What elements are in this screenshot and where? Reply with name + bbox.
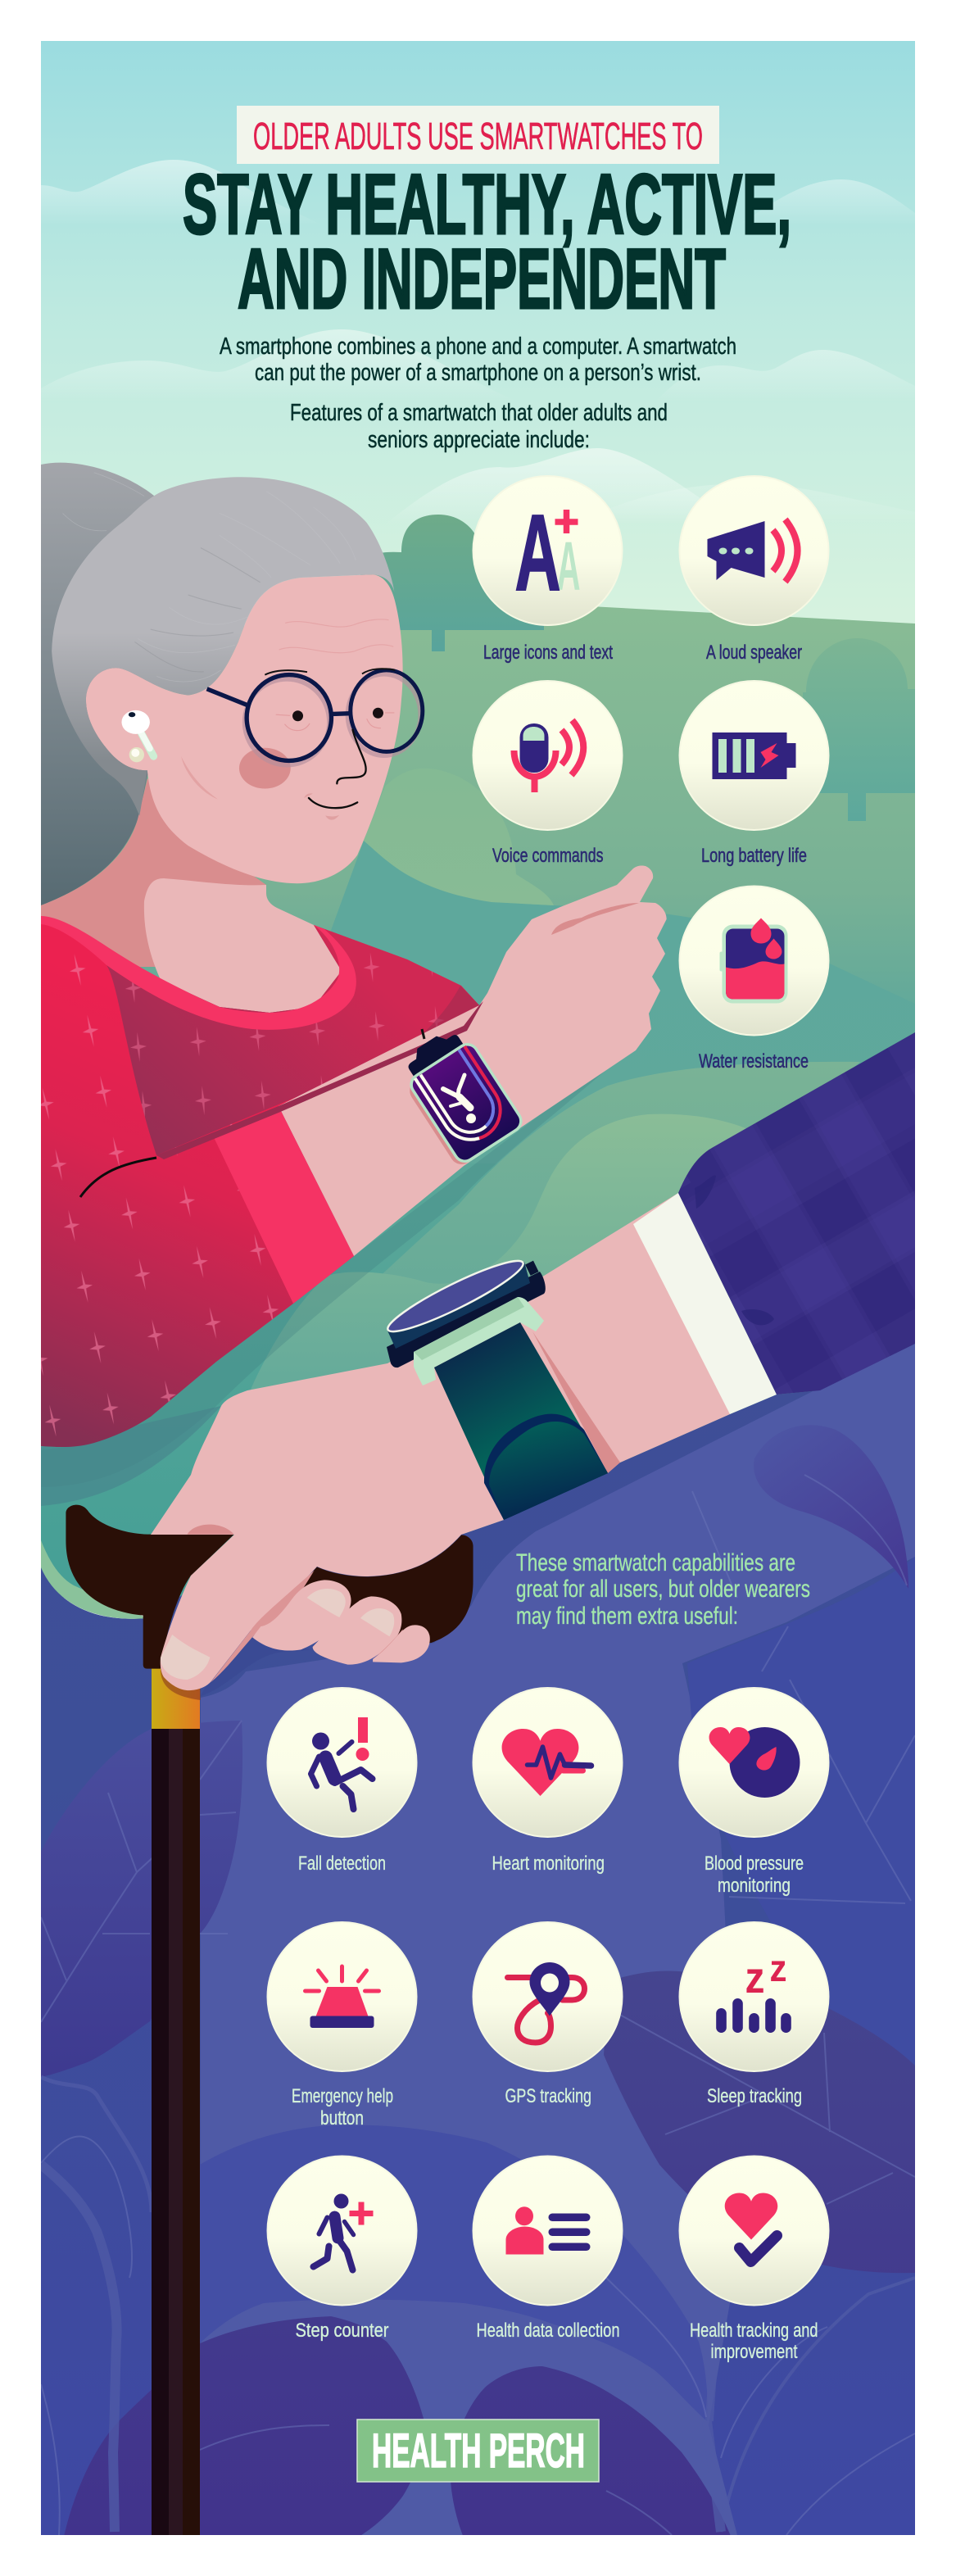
label: gps tracking: GPS tracking — [505, 2085, 591, 2107]
sky gradient — [41, 41, 915, 626]
cane handle — [66, 1505, 473, 1700]
face — [52, 473, 423, 883]
leaf veins — [41, 1475, 915, 2535]
label: large icons: Large icons and text — [483, 642, 613, 664]
hand shading and fingers — [161, 1525, 430, 1682]
title pill — [237, 106, 719, 164]
top right leaf — [754, 1425, 908, 1589]
collar — [41, 916, 356, 1030]
shoulder fold — [106, 925, 479, 1155]
icon: health tracking — [680, 2156, 829, 2306]
clouds — [41, 160, 915, 524]
icon: sleep tracking: z — [770, 1947, 786, 1989]
fall figure on watch — [443, 1075, 476, 1123]
hand crease — [551, 903, 639, 935]
watch band — [434, 1322, 608, 1520]
icon: water resistance — [680, 887, 829, 1036]
near foreground hill — [250, 1114, 748, 1391]
watch wire — [422, 1029, 424, 1039]
label: fall detection: Fall detection — [298, 1853, 386, 1875]
black fold line — [80, 1158, 156, 1197]
round smartwatch — [383, 1252, 608, 1520]
left bottom purple leaf — [63, 2316, 425, 2540]
lighter blue leaf — [200, 1344, 915, 2535]
central bottom purple leaf — [451, 2366, 732, 2540]
jaw line — [181, 756, 218, 800]
label: emergency button — [292, 2085, 393, 2129]
label: emergency button: button — [320, 2107, 364, 2129]
forearm — [151, 1193, 730, 1690]
watch dial — [383, 1252, 528, 1340]
central blue leaf — [200, 2125, 708, 2421]
red underside of sleeve over arm — [156, 1001, 483, 1159]
shirt body — [41, 916, 479, 1447]
features intro text: Features of a smartwatch that older adults and — [290, 400, 668, 426]
icon: health data — [473, 2156, 623, 2306]
icon: battery — [680, 681, 829, 830]
watch case upper — [387, 1262, 530, 1349]
icon: large text — [473, 476, 623, 625]
label: blood pressure: monitoring — [718, 1875, 791, 1897]
cane shaft — [152, 1729, 200, 2535]
label: speaker: A loud speaker — [706, 642, 802, 664]
tree right — [803, 638, 915, 821]
features intro text: seniors appreciate include: — [368, 427, 590, 453]
neck — [41, 778, 266, 967]
raised arm — [279, 865, 667, 1256]
sleeve stars overlay — [125, 954, 444, 1117]
icon: emergency button — [267, 1922, 416, 2071]
icon: blood pressure — [680, 1688, 829, 1837]
shirt cuff white — [633, 1193, 777, 1414]
mouth — [309, 798, 357, 808]
label: health tracking: improvement — [711, 2341, 798, 2363]
label: blood pressure: Blood pressure — [705, 1853, 804, 1875]
smartwatch on raised wrist — [391, 1022, 525, 1168]
light leaf stems — [41, 2077, 915, 2532]
finger shadow on blue — [201, 1633, 311, 1696]
watch crown nub — [525, 1261, 539, 1276]
intro text — [220, 333, 736, 386]
icon: sleep tracking: z — [745, 1953, 765, 2002]
right purple leaf — [604, 1971, 915, 2273]
woman — [41, 463, 667, 1447]
label: health data: Health data collection — [477, 2320, 619, 2342]
band loop — [484, 1414, 608, 1520]
watch case lower — [387, 1272, 546, 1367]
icon: large text: A — [514, 492, 560, 613]
cheek — [239, 748, 291, 788]
label: sleep tracking: Sleep tracking — [707, 2085, 802, 2107]
icon: heart monitoring — [473, 1688, 623, 1837]
bush — [364, 807, 554, 905]
icon: sleep tracking — [680, 1922, 829, 2071]
capabilities intro text — [516, 1549, 810, 1630]
glasses — [207, 670, 423, 765]
label: water resistance: Water resistance — [699, 1050, 809, 1073]
cane collar — [152, 1668, 200, 1729]
icon: speaker — [680, 476, 829, 625]
label: emergency button: Emergency help — [292, 2085, 393, 2107]
light green crescent — [41, 1540, 147, 1619]
lower left teal lump — [41, 1406, 221, 1506]
icon: gps tracking — [473, 1922, 623, 2071]
earbud — [121, 710, 153, 762]
left upper purple leaf — [41, 1721, 242, 2077]
cane — [66, 1505, 473, 2535]
watch strap mint — [414, 1297, 544, 1386]
capabilities intro text: These smartwatch capabilities are — [516, 1549, 795, 1576]
intro text: can put the power of a smartphone on a person’s wrist. — [255, 360, 701, 386]
teal valley — [331, 841, 867, 982]
icon: large text: A — [557, 528, 580, 605]
nose — [337, 730, 366, 783]
capabilities intro text: may find them extra useful: — [516, 1603, 738, 1630]
ear and head skin — [86, 574, 403, 883]
right darker blue region — [687, 1557, 915, 1899]
watch crown — [402, 1027, 465, 1079]
label: health tracking — [690, 2320, 818, 2363]
label: heart monitoring: Heart monitoring — [492, 1853, 605, 1875]
arm shadow — [138, 1073, 601, 1425]
far foreground hill — [383, 1062, 860, 1284]
shirt stars — [41, 955, 287, 1436]
green hill — [41, 604, 915, 1598]
plaid sleeve — [567, 927, 956, 1486]
icon: step counter — [267, 2156, 416, 2306]
icon: voice — [473, 681, 623, 830]
label: battery: Long battery life — [701, 845, 807, 867]
hair front — [52, 477, 394, 816]
sleeve end shade — [424, 986, 479, 1032]
title — [183, 157, 791, 327]
label: health tracking: Health tracking and — [690, 2320, 818, 2342]
sleeve cuff — [213, 1106, 354, 1304]
chest — [144, 878, 342, 1013]
watch rings — [415, 1046, 511, 1151]
logo: Health Perch — [357, 2420, 599, 2482]
hair bun — [41, 463, 156, 905]
watch face — [407, 1041, 525, 1165]
label: voice: Voice commands — [492, 845, 603, 867]
intro text: A smartphone combines a phone and a computer. A smartwatch — [220, 333, 736, 360]
lower arm and hand — [151, 927, 956, 1696]
label: step counter: Step counter — [295, 2320, 389, 2342]
icon: fall detection — [267, 1688, 416, 1837]
forehead wrinkles — [279, 619, 393, 653]
features intro text — [290, 400, 668, 453]
eyes — [265, 669, 395, 731]
tree left — [360, 515, 544, 651]
capabilities intro text: great for all users, but older wearers — [516, 1576, 810, 1603]
wrist shadow by band — [532, 1331, 620, 1473]
blue lower background — [41, 1344, 915, 2535]
logo: Health Perch: HEALTH PERCH — [372, 2424, 585, 2478]
label: blood pressure — [705, 1853, 804, 1897]
hair strands — [135, 548, 261, 672]
